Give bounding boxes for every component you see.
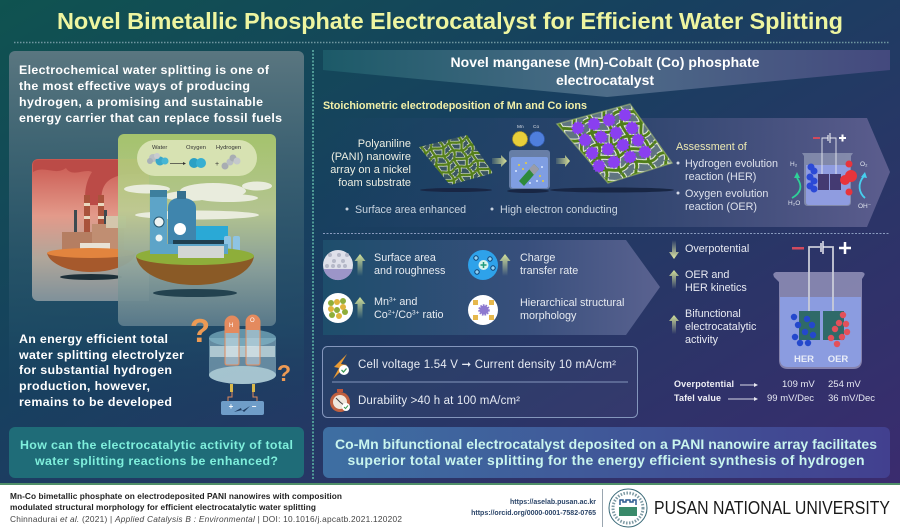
conclusion box: Co-Mn bifunctional electrocatalyst deposited on a PANI nanowire array facilitates <box>335 436 877 452</box>
illustration: electrolyzer with question marks: H <box>229 323 233 329</box>
text: unresolved problem: water splitting electrolyzer <box>18 348 184 362</box>
list: electrochemical outcomes: Bifunctional <box>685 308 741 320</box>
small electrolysis cell: H₂O <box>788 200 800 207</box>
panel: improved properties <box>323 240 660 335</box>
question box: water splitting reactions be enhanced? <box>34 454 278 468</box>
property: morphology: Hierarchical structural <box>520 297 624 309</box>
property: morphology <box>468 295 624 325</box>
small electrolysis cell: H₂ <box>790 161 798 168</box>
text: cell voltage: Cell voltage 1.54 V ➞ Current density 10 mA/cm² <box>358 359 616 371</box>
metrics table: Tafel value <box>674 393 721 403</box>
assessment list: Oxygen evolution <box>685 188 768 200</box>
citation <box>10 491 402 524</box>
property: ion ratio: /Co <box>395 309 412 321</box>
assessment list: reaction (HER) <box>685 171 756 183</box>
beaker with Mn and Co ions: Mn <box>517 124 524 130</box>
property: charge transfer: transfer rate <box>520 265 578 277</box>
PANI description: array on a nickel <box>330 164 411 176</box>
panel: electrodeposition process <box>323 100 890 227</box>
panel: heading band <box>323 50 890 97</box>
small electrolysis cell: O₂ <box>860 161 868 168</box>
PANI description: (PANI) nanowire <box>331 151 411 163</box>
metrics table: 36 mV/Dec <box>828 393 875 404</box>
illustration: electrolyzer with question marks: O <box>250 318 255 324</box>
molecule equation: Water <box>152 145 167 151</box>
list: electrochemical outcomes: HER kinetics <box>685 282 747 294</box>
large electrolysis cell: OER <box>828 354 848 365</box>
intro text: energy carrier that can replace fossil fuels <box>19 111 282 125</box>
property: surface area: and roughness <box>374 265 446 277</box>
benefits: High electron conducting <box>500 204 618 216</box>
clouds <box>124 182 272 220</box>
question box: How can the electrocatalytic activity of total <box>20 438 293 452</box>
assessment list: Assessment of <box>676 141 748 153</box>
links: https://aselab.pusan.ac.kr <box>510 499 596 506</box>
arrow <box>492 155 507 167</box>
property: ion ratio <box>323 293 443 323</box>
list: electrochemical outcomes: activity <box>685 334 719 346</box>
property: ion ratio: and <box>396 296 417 308</box>
list: electrochemical outcomes: Overpotential <box>685 243 749 255</box>
beaker with Mn and Co ions: Co <box>533 124 539 130</box>
illustration: electrolyzer with question marks: + <box>229 402 234 411</box>
molecule equation: + <box>215 161 219 168</box>
assessment list: reaction (OER) <box>685 201 757 213</box>
large electrolysis cell: HER <box>794 354 814 365</box>
illustration: electrolyzer with question marks: − <box>252 402 257 411</box>
property: charge transfer <box>468 250 578 280</box>
metrics table: 99 mV/Dec <box>767 393 814 404</box>
panel: heading band: electrocatalyst <box>556 72 654 88</box>
citation: modulated structural morphology for efficient electrocatalytic water splitting <box>10 502 316 512</box>
property: ion ratio: ratio <box>419 309 443 321</box>
illustration: electrolyzer with question marks <box>190 312 291 415</box>
text: unresolved problem: for substantial hydrogen <box>19 363 172 377</box>
arrow <box>556 155 570 167</box>
text: unresolved problem: remains to be developed <box>19 395 172 409</box>
property: surface area: Surface area <box>374 252 436 264</box>
property: ion ratio: 3+ <box>389 296 397 304</box>
assessment list: Hydrogen evolution <box>685 158 778 170</box>
links: https://orcid.org/0000-0001-7582-0765 <box>471 510 596 517</box>
text: durability: Durability >40 h at 100 mA/cm² <box>358 395 520 407</box>
list: electrochemical outcomes <box>669 240 757 346</box>
text: unresolved problem: An energy efficient total <box>19 332 168 346</box>
benefits <box>346 204 618 216</box>
small electrolysis cell <box>788 133 872 210</box>
university seal <box>609 489 647 527</box>
illustration: clean hydrogen island <box>118 134 276 326</box>
property: morphology: morphology <box>520 310 577 322</box>
PANI description: foam substrate <box>338 177 411 189</box>
beaker with Mn and Co ions <box>507 124 550 193</box>
text: unresolved problem: production, however, <box>19 379 150 393</box>
illustration: fossil fuel island <box>32 159 149 301</box>
catalyst-coated nanowire mesh <box>550 104 674 192</box>
PANI description: Polyaniline <box>358 138 411 150</box>
property: charge transfer: Charge <box>520 252 555 264</box>
icon: stopwatch <box>330 389 350 412</box>
question box <box>9 427 304 478</box>
title: Novel Bimetallic Phosphate Electrocatalyst for Efficient Water Splitting <box>57 8 843 34</box>
panel: water splitting background <box>9 51 304 421</box>
molecule equation: Hydrogen <box>216 145 241 151</box>
intro text: hydrogen, a promising and sustainable <box>19 95 263 109</box>
citation: Mn-Co bimetallic phosphate on electrodeposited PANI nanowires with composition <box>10 491 342 501</box>
metrics table <box>674 379 875 404</box>
property: ion ratio: Mn <box>374 296 417 308</box>
PANI nanowire mesh <box>419 135 493 192</box>
assessment list <box>676 141 778 213</box>
intro text: Electrochemical water splitting is one of <box>19 63 270 77</box>
property: ion ratio: 3+ <box>412 310 420 316</box>
metrics table: Overpotential <box>674 379 734 389</box>
molecule equation <box>137 140 257 176</box>
conclusion box: superior total water splitting for the energy efficient synthesis of hydrogen <box>348 452 864 468</box>
property: ion ratio: Co <box>374 309 443 321</box>
illustration: electrolyzer with question marks: ? <box>190 312 210 349</box>
metrics table: 109 mV <box>782 379 815 390</box>
list: electrochemical outcomes: OER and <box>685 269 729 281</box>
property: surface area <box>323 250 446 280</box>
illustration: electrolyzer with question marks: ? <box>277 360 291 386</box>
molecule equation: Oxygen <box>186 145 206 151</box>
list: electrochemical outcomes: electrocatalytic <box>685 321 757 333</box>
small electrolysis cell: OH⁻ <box>858 203 872 210</box>
benefits: Surface area enhanced <box>355 204 466 216</box>
property: ion ratio: 2+ <box>388 310 395 316</box>
intro text: the most effective ways of producing <box>19 79 250 93</box>
panel: heading band: Novel manganese (Mn)-Cobalt (Co) phosphate <box>450 54 760 70</box>
conclusion box <box>323 427 890 478</box>
footer <box>0 483 900 531</box>
large electrolysis cell <box>773 241 865 369</box>
subheading: Stoichiometric electrodeposition of Mn and Co ions <box>323 100 587 112</box>
icon: lightning <box>333 354 349 379</box>
metrics table: 254 mV <box>828 379 861 390</box>
performance box <box>322 346 638 418</box>
citation: Chinnadurai et al. (2021) | Applied Catalysis B : Environmental | DOI: 10.1016/j.apcatb.2021.120202 <box>10 514 402 524</box>
